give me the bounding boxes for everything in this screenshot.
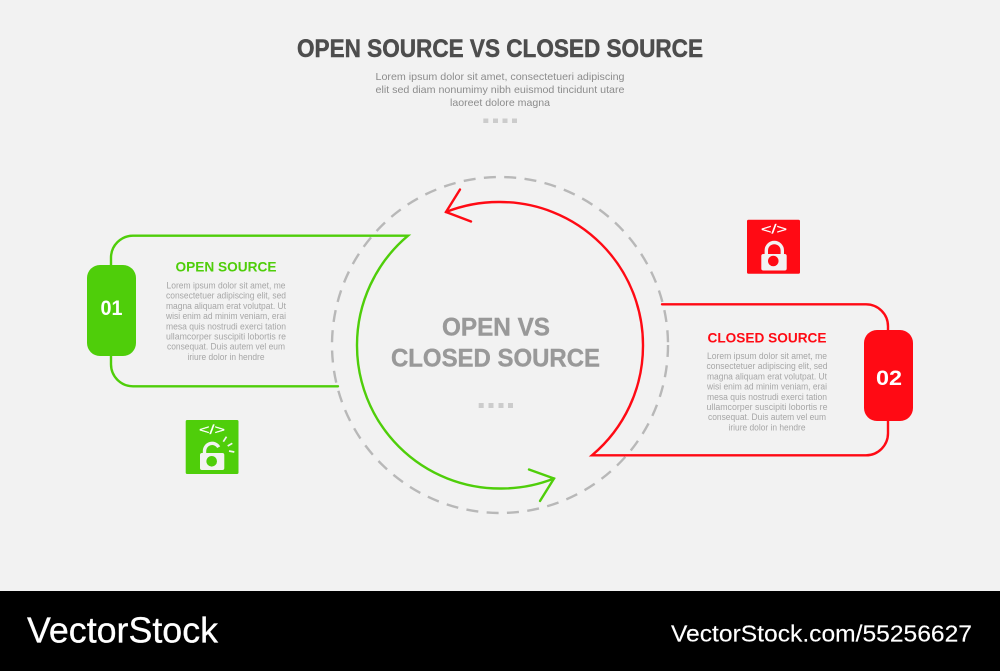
red panel outline and arrow [446, 190, 888, 455]
open source body text: magna aliquam erat volutpat. Ut [166, 301, 287, 311]
badge 02 [864, 330, 913, 421]
open source body text: ullamcorper suscipiti lobortis re [166, 332, 286, 342]
dashed circle [332, 177, 668, 513]
icon: open padlock with code [186, 420, 238, 474]
center dots [479, 403, 513, 408]
center label: CLOSED SOURCE [391, 344, 600, 372]
heading: open source: OPEN SOURCE [176, 260, 276, 274]
open source body text: mesa quis nostrudi exerci tation [166, 321, 286, 331]
title: OPEN SOURCE VS CLOSED SOURCE [297, 35, 703, 63]
closed source body text: mesa quis nostrudi exerci tation [707, 392, 827, 402]
closed source body text: ullamcorper suscipiti lobortis re [706, 402, 828, 412]
subtitle text: elit sed diam nonumimy nibh euismod tincidunt utare [376, 85, 625, 96]
center label: OPEN VS [442, 314, 550, 342]
subtitle text [376, 72, 625, 109]
badge 01: 01 [100, 297, 123, 320]
open source body text [165, 280, 287, 362]
closed source body text: iriure dolor in hendre [728, 422, 806, 432]
open source body text: consequat. Duis autem vel eum [167, 342, 285, 352]
icon: open padlock with code: </> [199, 423, 225, 437]
footer bar: VectorStock [27, 610, 219, 651]
closed source body text: magna aliquam erat volutpat. Ut [707, 371, 828, 381]
closed source body text [706, 351, 828, 432]
open source body text: iriure dolor in hendre [188, 352, 265, 362]
badge 02: 02 [876, 367, 902, 390]
closed source body text: consequat. Duis autem vel eum [708, 412, 826, 422]
subtitle text: Lorem ipsum dolor sit amet, consectetueri adipiscing [376, 72, 625, 83]
open source body text: Lorem ipsum dolor sit amet, me [166, 280, 286, 290]
center label [391, 314, 600, 372]
open source body text: wisi enim ad minim veniam, erai [165, 311, 286, 321]
icon: closed padlock with code [747, 220, 800, 274]
heading: closed source: CLOSED SOURCE [708, 330, 826, 346]
closed source body text: consectetuer adipiscing elit, sed [706, 361, 828, 371]
subtitle text: laoreet dolore magna [450, 98, 550, 109]
icon: closed padlock with code: </> [761, 223, 787, 237]
footer bar: VectorStock.com/55256627 [671, 620, 972, 646]
green panel outline and arrow [111, 236, 554, 501]
title dots [483, 118, 517, 123]
closed source body text: wisi enim ad minim veniam, erai [706, 382, 827, 392]
badge 01 [87, 265, 136, 356]
footer bar [0, 591, 1000, 671]
closed source body text: Lorem ipsum dolor sit amet, me [707, 351, 827, 361]
open source body text: consectetuer adipiscing elit, sed [166, 291, 286, 301]
